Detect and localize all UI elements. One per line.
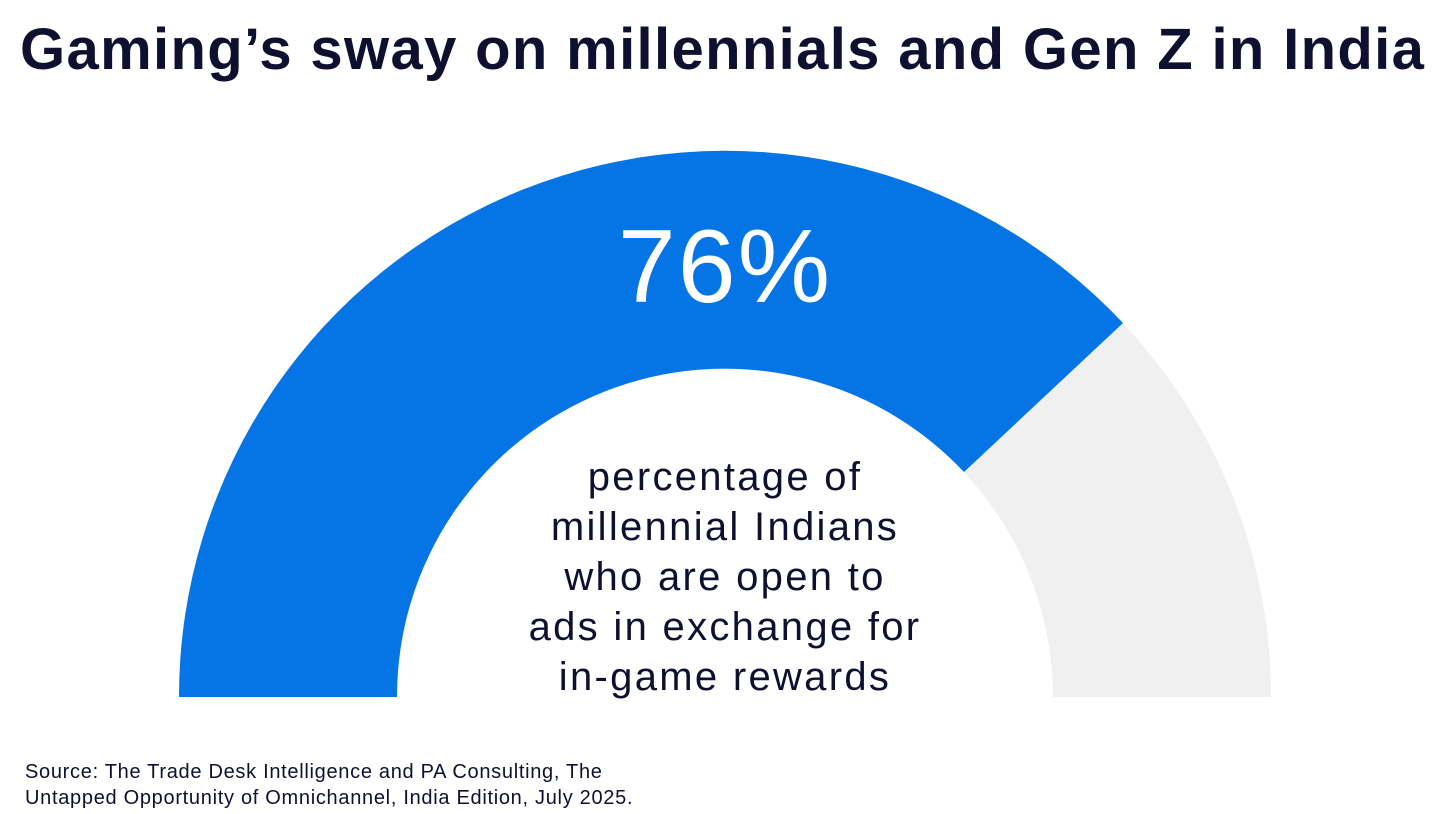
gauge value arc 76% bbox=[179, 151, 1123, 697]
big number: 76% bbox=[618, 209, 832, 325]
source note: Untapped Opportunity of Omnichannel, India Edition, July 2025. bbox=[25, 787, 633, 809]
description text bbox=[529, 455, 921, 699]
source note: Source: The Trade Desk Intelligence and PA Consulting, The bbox=[25, 761, 603, 783]
description text: in-game rewards bbox=[559, 655, 891, 699]
gauge background arc bbox=[179, 151, 1271, 697]
description text: who are open to bbox=[564, 555, 886, 599]
description text: ads in exchange for bbox=[529, 605, 921, 649]
source note bbox=[25, 761, 633, 809]
description text: percentage of bbox=[588, 455, 862, 499]
title: Gaming’s sway on millennials and Gen Z in India bbox=[20, 17, 1425, 82]
description text: millennial Indians bbox=[551, 505, 899, 549]
